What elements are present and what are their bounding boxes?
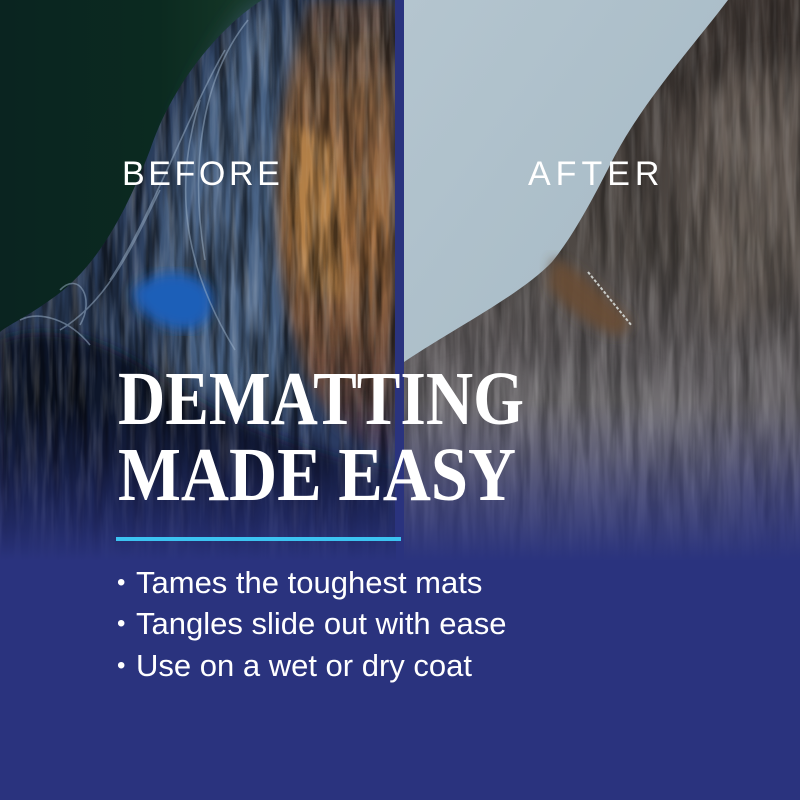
label: before: BEFORE [122,155,283,193]
benefits list: • [117,652,125,679]
accent rule [116,537,401,541]
benefits list: • [117,610,125,637]
title: MADE EASY [118,433,516,517]
icon: blue collar [132,273,213,330]
title: DEMATTING [118,357,524,441]
label: after: AFTER [528,155,664,193]
gradient fade into navy [0,400,800,562]
photo: before, matted coat [0,0,396,560]
icon: brown neck ruff and collar [548,258,632,336]
photo: after, groomed coat [404,0,800,560]
navy panel [0,560,800,800]
benefits list: Tangles slide out with ease [136,606,507,641]
benefits list: Tames the toughest mats [136,565,482,600]
center divider [395,0,404,540]
benefits list [117,565,507,683]
benefits list: Use on a wet or dry coat [136,648,472,683]
benefits list: • [117,569,125,596]
